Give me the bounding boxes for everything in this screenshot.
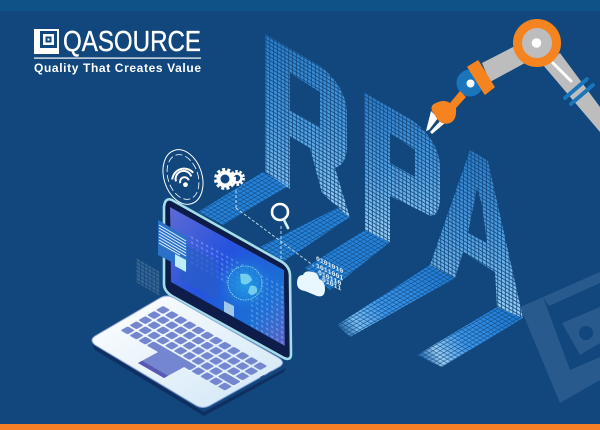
shoulder pin (532, 38, 541, 48)
floor: R right leg (260, 208, 350, 262)
globe (222, 261, 268, 306)
wrist pin (466, 80, 474, 88)
letter A (430, 150, 523, 318)
wide keys (145, 335, 242, 392)
floor: A left leg (337, 265, 455, 337)
logo (34, 26, 201, 75)
logo mark (34, 29, 59, 54)
blue wrist joint (456, 70, 484, 96)
watermark logo (520, 272, 600, 403)
screen dots (188, 232, 284, 350)
RPA dotted letters (265, 34, 523, 318)
small screen tile (224, 301, 234, 317)
ports (260, 371, 273, 379)
dashed connector lines (236, 190, 314, 266)
arm highlight (553, 63, 571, 81)
laptop base (92, 296, 282, 408)
binary digits (316, 255, 343, 294)
logo wordmark: QASOURCE (63, 26, 201, 58)
letter P (364, 92, 440, 242)
panel on screen (180, 240, 218, 300)
icon: cloud (297, 271, 325, 296)
top band (0, 0, 600, 11)
binary digits: 1011001 (316, 262, 343, 283)
robot arm (426, 24, 600, 134)
panel tile (175, 254, 186, 272)
binary digits: 01011 (322, 276, 341, 294)
touchpad (138, 351, 186, 378)
binary digits: 0101010 (316, 255, 343, 276)
dark lower band (171, 282, 285, 356)
binary digits: 010110 (318, 269, 341, 289)
shoulder joint (518, 24, 556, 62)
laptop shadow (92, 344, 286, 416)
gripper body (432, 91, 466, 124)
laptop display (170, 207, 285, 356)
lower arm (543, 53, 600, 132)
icon: wifi (156, 144, 210, 210)
blue rings (565, 79, 593, 104)
gripper fingers (426, 111, 445, 134)
floor: R left leg (198, 172, 290, 225)
floor shadows of letters (198, 172, 523, 367)
bottom orange band (0, 424, 600, 430)
icon: gears (216, 170, 244, 188)
floor: P stem (305, 230, 390, 290)
laptop (92, 199, 291, 416)
icon: magnifier (272, 204, 288, 228)
floor: A right leg (417, 307, 523, 367)
keyboard (119, 305, 269, 392)
panel text lines (159, 225, 186, 256)
floating panel (158, 220, 187, 272)
logo rule (34, 58, 201, 59)
laptop screen frame (164, 199, 291, 359)
tagline: Quality That Creates Value (34, 61, 201, 75)
orange collar (468, 61, 494, 94)
letter R (265, 34, 350, 218)
faint dots left of laptop (136, 258, 160, 296)
upper arm (482, 47, 525, 82)
touchpad edge (138, 361, 168, 378)
